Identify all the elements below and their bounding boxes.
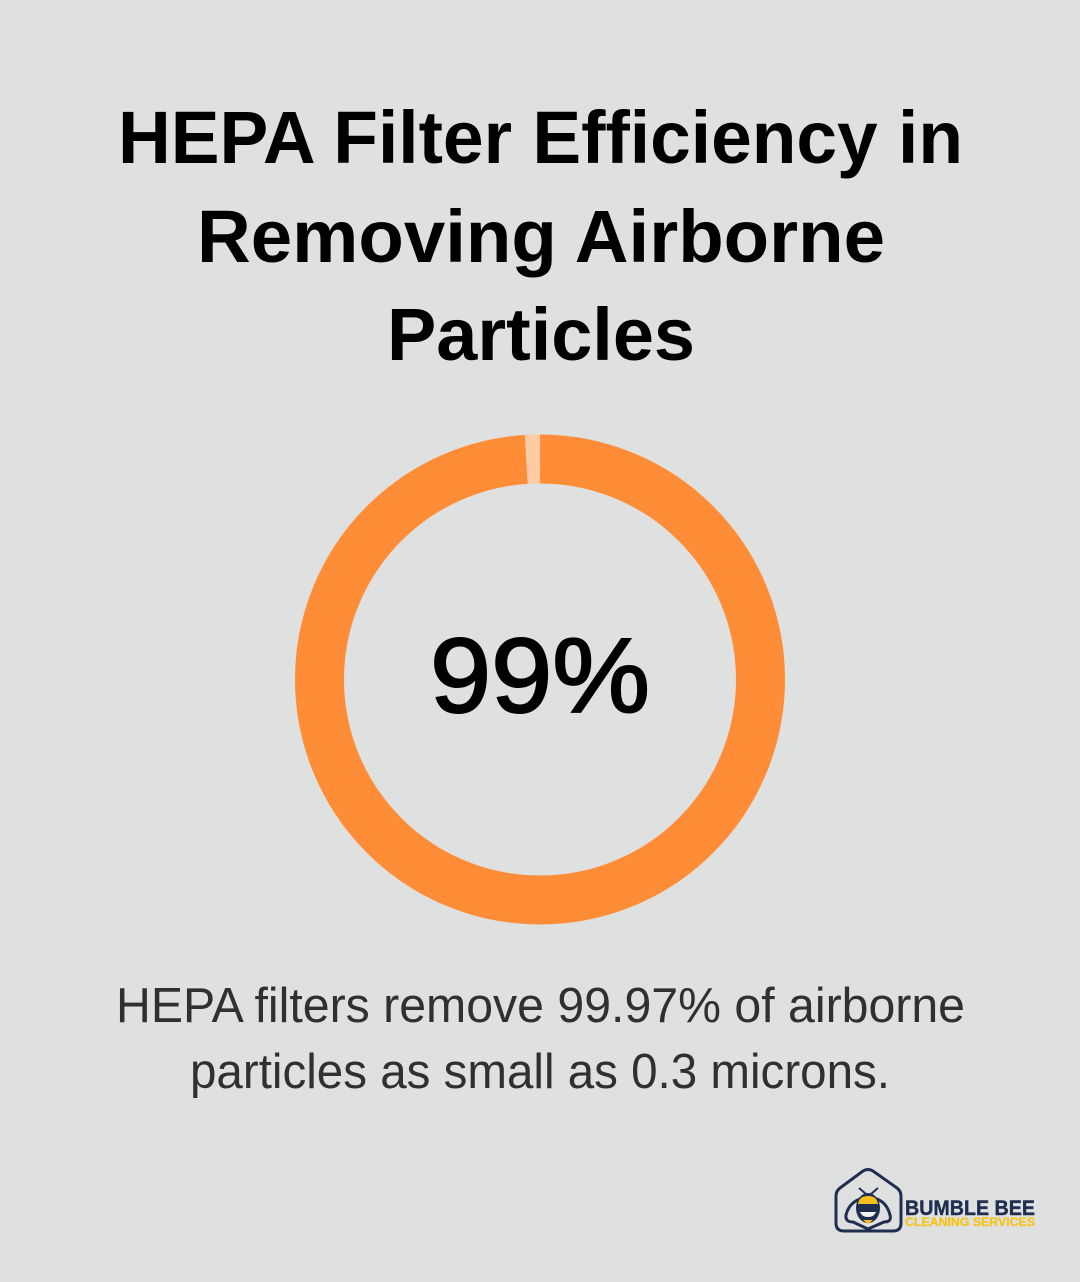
title: HEPA Filter Efficiency in [118, 96, 963, 179]
title: Particles [387, 293, 695, 376]
title [118, 96, 963, 376]
logo: Bumble Bee Cleaning Services [836, 1170, 1035, 1231]
donut value: 99% [430, 617, 650, 735]
description text: HEPA filters remove 99.97% of airborne [116, 979, 965, 1033]
logo tagline: CLEANING SERVICES [905, 1215, 1035, 1229]
description text [116, 979, 965, 1099]
icon: house outline with bee [836, 1170, 901, 1231]
description text: particles as small as 0.3 microns. [190, 1045, 890, 1099]
title: Removing Airborne [197, 195, 885, 278]
logo name: BUMBLE BEE [905, 1196, 1035, 1220]
donut chart: 99% [320, 459, 760, 900]
